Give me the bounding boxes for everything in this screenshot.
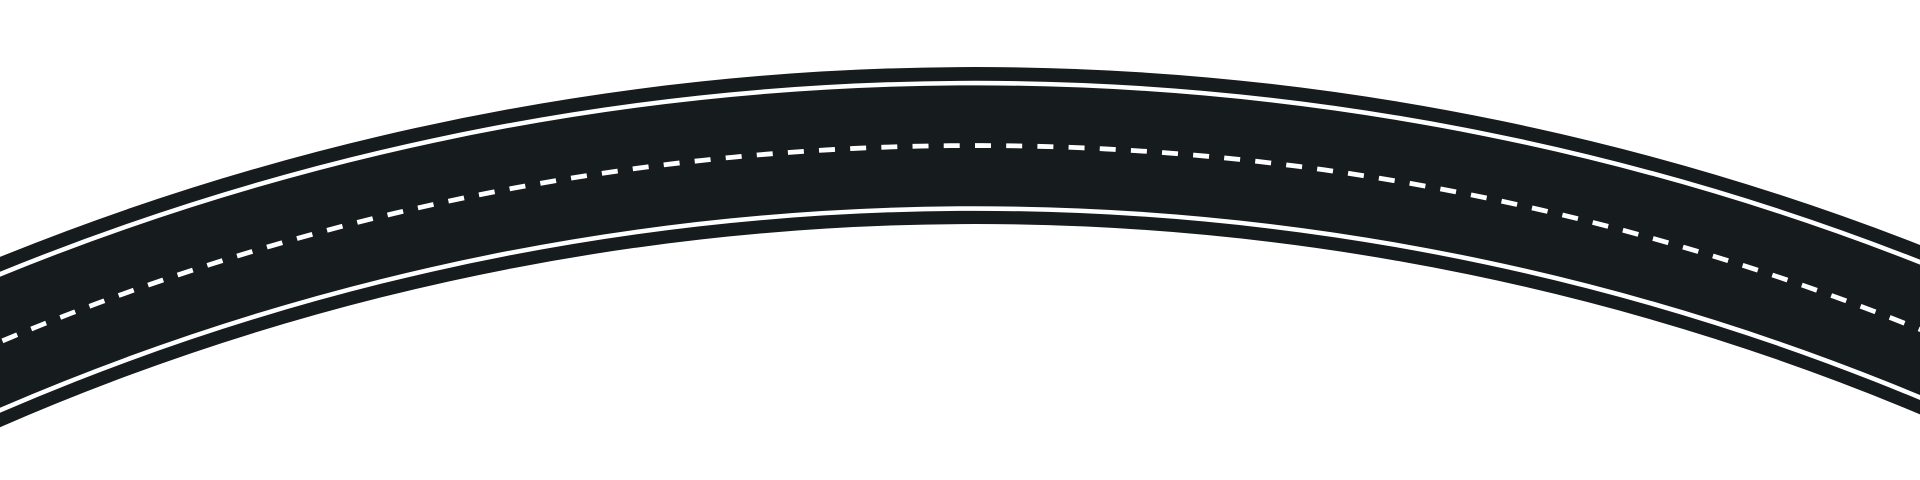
- centre dashed line, left half: [0, 146, 960, 359]
- centre dashed line, right half: [975, 144, 1920, 347]
- lower edge line: [0, 207, 1920, 437]
- upper edge line: [0, 82, 1920, 300]
- curved road: [0, 82, 1920, 437]
- road surface: [0, 144, 1920, 368]
